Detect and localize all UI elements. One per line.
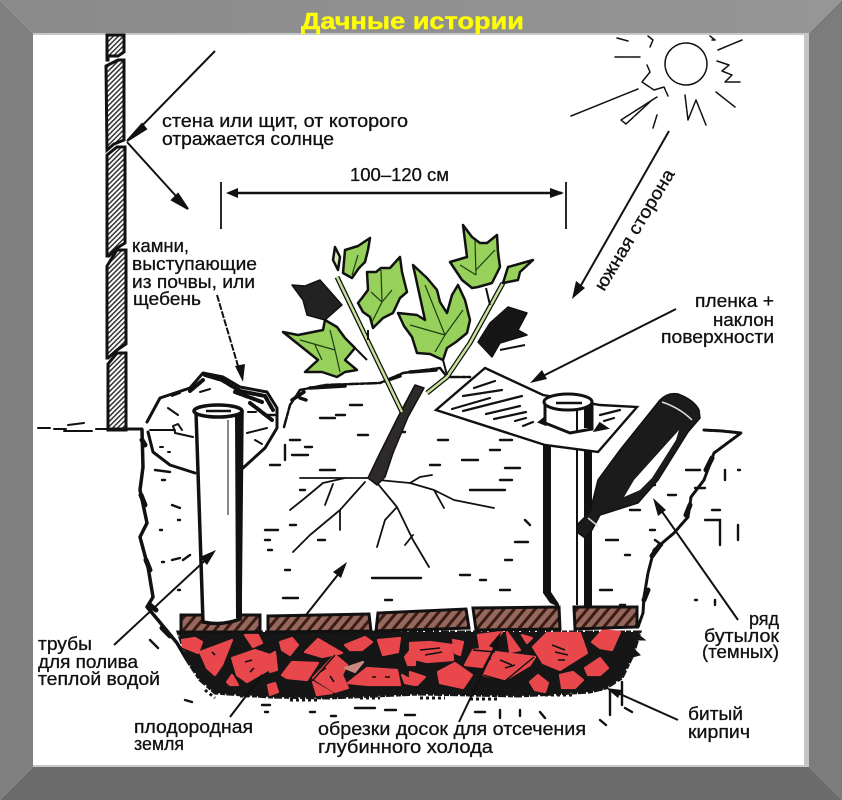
label: stones: из почвы, или [132,272,255,292]
frame: bottom band [0,767,842,800]
label: wall: отражается солнце [162,129,334,149]
right branch [427,283,503,393]
sun disc [665,43,707,85]
label: fertile soil: земля [134,734,184,754]
dark bottle [577,394,700,538]
sun [571,36,742,128]
broken bricks [182,630,620,695]
frame: right band [809,0,842,800]
soil speckles [150,405,740,725]
label: south side: южная сторона [590,165,679,294]
arrow: south side [572,131,669,299]
dark leaves [292,280,342,320]
leaf veins [300,240,495,372]
pipe left [194,405,242,623]
label: fertile soil [134,717,253,754]
label: bottles: ряд [749,609,779,629]
pipe right: lower body [543,440,592,608]
label: broken brick: битый [688,704,743,724]
arrow: bottles [653,498,738,620]
label: pipes: трубы [38,634,92,654]
label: film [661,291,774,347]
label: board offcuts [318,719,586,757]
label: stones: выступающие [132,254,257,274]
arrow: fertile soil [230,562,347,717]
label: broken brick: кирпич [688,722,750,742]
label: film: наклон [713,310,774,330]
gravel layer under boards [178,632,645,700]
label: pipes: теплой водой [38,669,160,689]
label: bottles: бутылок [704,626,779,646]
label: film: поверхности [661,327,774,347]
frame: top band [0,0,842,33]
trunk [368,385,424,485]
dimension 100–120 cm [221,165,566,229]
label: wall [162,111,408,149]
label: pipes [38,634,160,689]
arrow: sun rays to wall and reflection [127,51,215,209]
roots [290,475,494,567]
left branch [337,277,402,412]
brick texture marks [212,645,568,682]
label: bottles [702,609,779,662]
label: board offcuts: обрезки досок для отсечения [318,719,586,739]
arrow: board offcuts [459,632,501,722]
label: stones: щебень [133,289,201,309]
pipe right: top collar [540,394,606,433]
soil mound surface [284,368,470,427]
wall or shield [106,35,126,430]
plastic film [436,368,637,452]
label: stones: камни, [132,236,189,256]
arrow: pipes [114,550,216,645]
soil pit outline [38,368,741,660]
green leaves [283,225,533,377]
label: fertile soil: плодородная [134,717,253,737]
arrow: broken brick [606,688,678,720]
stones and crushed rock [147,373,277,473]
label: wall: стена или щит, от которого [162,111,408,131]
label: broken brick [688,704,750,742]
arrow: film [530,309,676,383]
dimension 100–120 cm: 100–120 см [350,165,449,185]
board offcuts [181,607,637,632]
label: pipes: для полива [38,652,139,672]
label: stones [132,236,257,309]
seedling [283,225,533,567]
title: Дачные истории [301,8,524,34]
frame: left band [0,0,33,800]
label: bottles: (темных) [702,642,779,662]
label: board offcuts: глубинного холода [318,737,494,757]
label: film: пленка + [695,291,774,311]
arrow: stones [217,295,245,382]
